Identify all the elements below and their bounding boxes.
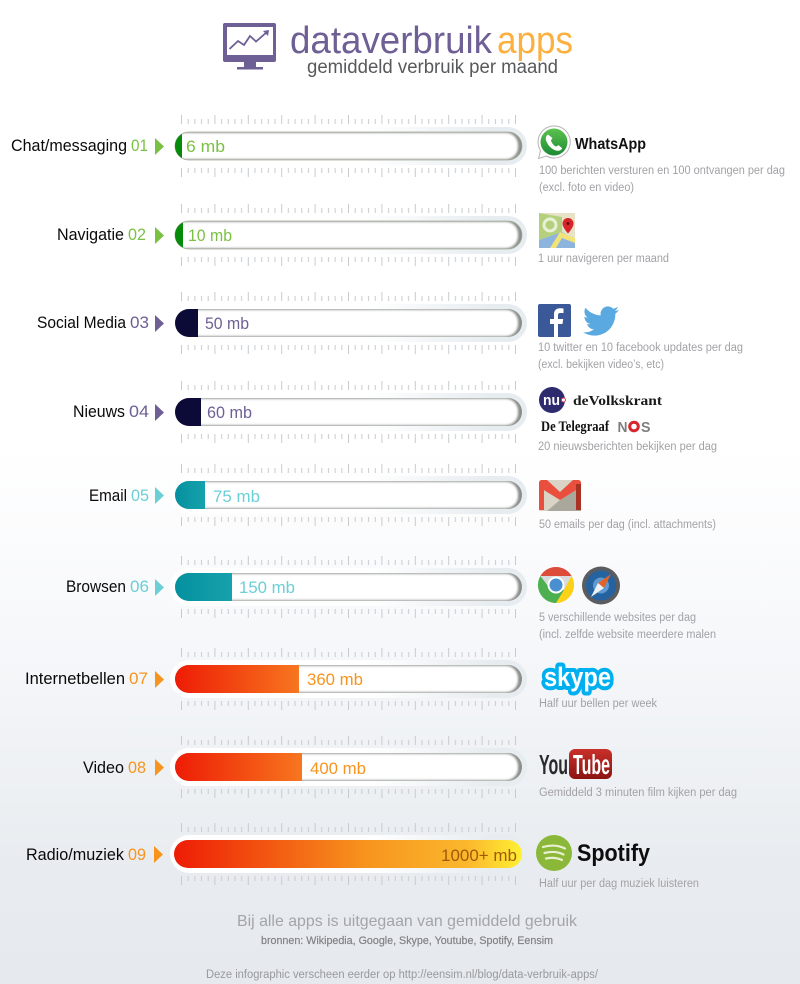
footnote heading: Bij alle apps is uitgegaan van gemiddeld gebruik <box>237 913 578 930</box>
description <box>539 165 785 194</box>
icon: chrome <box>538 567 574 603</box>
icon: news logos: N <box>618 419 628 436</box>
icon: youtube <box>539 749 612 780</box>
arrow <box>155 138 164 155</box>
description: (excl. bekijken video’s, etc) <box>538 359 664 371</box>
number: 03 <box>130 313 149 332</box>
number: 05 <box>131 486 149 505</box>
footer note <box>206 913 599 981</box>
description: 1 uur navigeren per maand <box>538 253 669 265</box>
bar: 75 mb <box>170 464 527 526</box>
icon: news logos: deVolkskrant <box>573 394 662 409</box>
icon: facebook <box>538 304 571 337</box>
icon: news logos: S <box>641 419 650 436</box>
icon: youtube: You <box>539 749 568 780</box>
icon: google maps <box>539 213 575 248</box>
description: 20 nieuwsberichten bekijken per dag <box>538 441 717 453</box>
label: Chat/messaging <box>11 136 127 155</box>
subtitle: gemiddeld verbruik per maand <box>307 57 558 78</box>
value: 75 mb <box>213 487 260 506</box>
row 04: nieuws <box>73 381 717 453</box>
value: 60 mb <box>207 403 252 422</box>
arrow <box>155 487 164 504</box>
title: dataverbruik <box>290 20 493 62</box>
arrow <box>155 759 164 776</box>
value: 10 mb <box>188 226 232 245</box>
label: Browsen <box>66 577 126 596</box>
description: (incl. zelfde website meerdere malen <box>539 629 716 641</box>
icon: twitter <box>583 306 619 336</box>
bar: 60 mb <box>170 381 527 443</box>
bar: 150 mb <box>170 556 527 618</box>
arrow <box>155 404 164 421</box>
description: Half uur per dag muziek luisteren <box>539 878 699 890</box>
number: 01 <box>131 136 148 155</box>
arrow <box>155 671 164 688</box>
description: 100 berichten versturen en 100 ontvangen per dag <box>539 165 785 177</box>
label: Nieuws <box>73 402 125 421</box>
icon: spotify: Spotify <box>577 840 651 867</box>
arrow <box>155 579 164 596</box>
title: apps <box>497 20 573 62</box>
row 06: browsen <box>66 556 716 641</box>
icon: whatsapp logo <box>538 126 646 158</box>
number: 02 <box>128 225 146 244</box>
bar: 1000+ mb <box>170 823 527 885</box>
number: 09 <box>128 845 146 864</box>
row 02: navigatie <box>57 204 669 266</box>
row 09: radio/muziek <box>26 823 699 890</box>
sources: bronnen: Wikipedia, Google, Skype, Youtube, Spotify, Eensim <box>261 935 553 947</box>
label: Internetbellen <box>25 669 125 688</box>
row 05: email <box>89 464 716 531</box>
icon: spotify <box>536 835 651 871</box>
description <box>538 342 743 371</box>
value: 400 mb <box>310 759 366 778</box>
number: 08 <box>128 758 146 777</box>
row 08: video <box>83 736 737 799</box>
icon: news logos <box>539 387 662 436</box>
icon: whatsapp logo: WhatsApp <box>575 136 646 153</box>
label: Radio/muziek <box>26 845 124 864</box>
row 03: social media <box>37 292 743 371</box>
icon: youtube: Tube <box>573 749 610 780</box>
bar: 6 mb <box>170 115 527 177</box>
bar: 360 mb <box>170 648 527 710</box>
label: Video <box>83 758 124 777</box>
label: Navigatie <box>57 225 124 244</box>
label: Email <box>89 486 127 505</box>
icon: skype: skype <box>544 662 611 692</box>
number: 07 <box>129 669 148 688</box>
arrow <box>154 846 163 863</box>
description: (excl. foto en video) <box>539 182 634 194</box>
icon: news logos: De Telegraaf <box>541 419 610 435</box>
number: 04 <box>129 402 149 421</box>
icon: gmail <box>539 480 581 511</box>
description <box>539 612 716 641</box>
icon: news logos: nu <box>543 392 560 409</box>
bar: 50 mb <box>170 292 527 354</box>
description: 10 twitter en 10 facebook updates per dag <box>538 342 743 354</box>
description: Gemiddeld 3 minuten film kijken per dag <box>539 787 737 799</box>
number: 06 <box>130 577 149 596</box>
description: 5 verschillende websites per dag <box>539 612 696 624</box>
row 07: internetbellen <box>25 648 657 710</box>
header: title block <box>223 20 573 78</box>
arrow <box>155 315 164 332</box>
value: 6 mb <box>186 137 225 156</box>
icon: monitor with rising chart <box>223 23 276 70</box>
description: Half uur bellen per week <box>539 698 657 710</box>
publication note: Deze infographic verscheen eerder op http://eensim.nl/blog/data-verbruik-apps/ <box>206 969 599 981</box>
value: 150 mb <box>239 578 295 597</box>
bar: 10 mb <box>170 204 527 266</box>
row 01: chat/messaging <box>11 115 785 194</box>
label: Social Media <box>37 313 126 332</box>
description: 50 emails per dag (incl. attachments) <box>539 519 716 531</box>
arrow <box>155 227 164 244</box>
value: 1000+ mb <box>441 846 517 865</box>
value: 50 mb <box>205 314 249 333</box>
bar: 400 mb <box>170 736 527 798</box>
icon: safari <box>582 566 620 604</box>
value: 360 mb <box>307 670 363 689</box>
